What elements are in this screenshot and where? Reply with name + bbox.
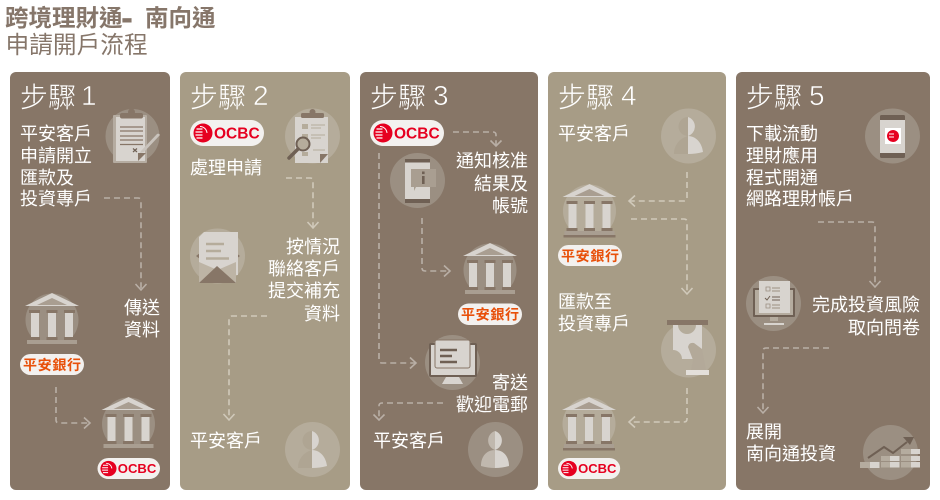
icon: bank bbox=[463, 243, 517, 296]
badge: Ping An Bank bbox=[458, 304, 522, 325]
heading: step 2: 步驟 bbox=[190, 82, 246, 113]
badge: OCBC: OCBC bbox=[394, 126, 440, 142]
badge: Ping An Bank: 平安銀行 bbox=[561, 248, 619, 264]
icon: application form bbox=[106, 108, 160, 163]
text: contact customer if needed: 聯絡客戶 bbox=[268, 259, 340, 279]
text: notify result and account number: 結果及 bbox=[474, 174, 528, 194]
icon: questionnaire on monitor bbox=[746, 276, 801, 331]
badge: OCBC bbox=[558, 458, 620, 479]
icon: hand inserting cash bbox=[661, 320, 716, 378]
text: contact customer if needed: 按情況 bbox=[286, 237, 340, 257]
text: contact customer if needed: 資料 bbox=[304, 304, 340, 324]
panel: step 2 bbox=[180, 72, 350, 490]
text: start southbound investing: 南向通投資 bbox=[746, 444, 836, 464]
text: Ping An customer: 平安客戶 bbox=[373, 431, 445, 451]
heading: step 5: 5 bbox=[809, 80, 825, 111]
heading: step 5: 步驟 bbox=[746, 82, 802, 113]
arrow: to customer bbox=[224, 316, 267, 420]
heading: step 4: 步驟 bbox=[558, 82, 614, 113]
text: complete risk questionnaire: 完成投資風險 bbox=[812, 295, 920, 315]
badge: Ping An Bank: 平安銀行 bbox=[461, 306, 519, 322]
text: send data: 傳送 bbox=[124, 298, 160, 318]
text: send welcome email: 歡迎電郵 bbox=[456, 395, 528, 415]
badge: OCBC: OCBC bbox=[578, 461, 616, 476]
text: apply for accounts: 平安客戶 bbox=[20, 124, 92, 144]
text: contact customer if needed: 提交補充 bbox=[268, 281, 340, 301]
text: send data: 資料 bbox=[124, 320, 160, 340]
panel: step 4 bbox=[548, 72, 726, 490]
icon: tablet with info bbox=[390, 153, 445, 208]
icon: bank bbox=[562, 184, 616, 238]
icon: customer bbox=[285, 422, 340, 477]
arrow: to contact customer bbox=[286, 178, 318, 228]
title: 南向通 bbox=[145, 5, 216, 31]
icon: bank bbox=[25, 293, 79, 346]
text: download app: 理財應用 bbox=[746, 145, 818, 166]
icon: monitor with email bbox=[425, 335, 480, 390]
arrow: to welcome email bbox=[379, 153, 416, 368]
arrow: to notification bbox=[453, 132, 502, 146]
icon: customer bbox=[661, 108, 716, 164]
arrow: to Ping An Bank bbox=[422, 218, 450, 276]
arrow: to OCBC bank bbox=[629, 388, 687, 428]
text: download app: 下載流動 bbox=[746, 124, 818, 144]
heading: step 2: 2 bbox=[253, 80, 269, 111]
arrow: to start investing bbox=[758, 348, 829, 413]
heading: step 1: 1 bbox=[81, 80, 97, 111]
text: apply for accounts: 申請開立 bbox=[20, 146, 92, 166]
panel: step 5 bbox=[736, 72, 930, 490]
icon: phone with app bbox=[865, 108, 920, 164]
text: Ping An customer: 平安客戶 bbox=[558, 124, 630, 144]
badge: Ping An Bank bbox=[20, 354, 84, 375]
text: remit to investment account: 投資專戶 bbox=[558, 314, 630, 334]
panel: step 3 bbox=[360, 72, 538, 490]
arrow: to Ping An Bank bbox=[629, 172, 687, 206]
badge: Ping An Bank bbox=[558, 245, 622, 266]
text: apply for accounts: 匯款及 bbox=[20, 168, 74, 188]
text: remit to investment account: 匯款至 bbox=[558, 292, 612, 312]
arrow: to OCBC bbox=[56, 387, 90, 428]
panel: step 1 bbox=[10, 72, 170, 490]
arrow: to customer bbox=[374, 403, 443, 420]
heading: step 4: 4 bbox=[621, 80, 637, 111]
icon: customer bbox=[468, 422, 523, 477]
text: apply for accounts: 投資專戶 bbox=[20, 189, 92, 209]
title bbox=[5, 0, 216, 59]
text: notify result and account number: 帳號 bbox=[492, 196, 528, 216]
heading: step 3: 步驟 bbox=[370, 82, 426, 113]
text: notify result and account number: 通知核准 bbox=[456, 151, 528, 171]
icon: envelope bbox=[190, 228, 245, 284]
heading: step 3: 3 bbox=[433, 80, 449, 111]
text: start southbound investing: 展開 bbox=[746, 422, 782, 442]
text: complete risk questionnaire: 取向問卷 bbox=[848, 318, 920, 338]
icon: bank bbox=[102, 397, 156, 450]
text: process application: 處理申請 bbox=[190, 158, 262, 178]
title: 申請開戶流程 bbox=[6, 32, 148, 59]
badge: OCBC bbox=[98, 458, 160, 479]
arrow: to remittance bbox=[631, 219, 692, 294]
badge: OCBC bbox=[190, 120, 264, 146]
arrow: to send data bbox=[104, 198, 146, 290]
arrow: to questionnaire bbox=[818, 222, 880, 287]
badge: OCBC bbox=[370, 120, 444, 146]
icon: growth chart with coins bbox=[860, 425, 920, 480]
text: Ping An customer: 平安客戶 bbox=[190, 431, 262, 451]
text: download app: 程式開通 bbox=[746, 168, 818, 188]
title: 跨境理財通 bbox=[5, 5, 122, 31]
icon: bank bbox=[562, 397, 616, 450]
badge: OCBC: OCBC bbox=[118, 461, 156, 476]
heading: step 1: 步驟 bbox=[20, 82, 76, 113]
badge: OCBC: OCBC bbox=[214, 126, 260, 142]
icon: checklist with magnifier bbox=[285, 108, 340, 164]
badge: Ping An Bank: 平安銀行 bbox=[23, 357, 81, 373]
text: send welcome email: 寄送 bbox=[492, 373, 528, 393]
text: download app: 網路理財帳戶 bbox=[746, 189, 854, 209]
